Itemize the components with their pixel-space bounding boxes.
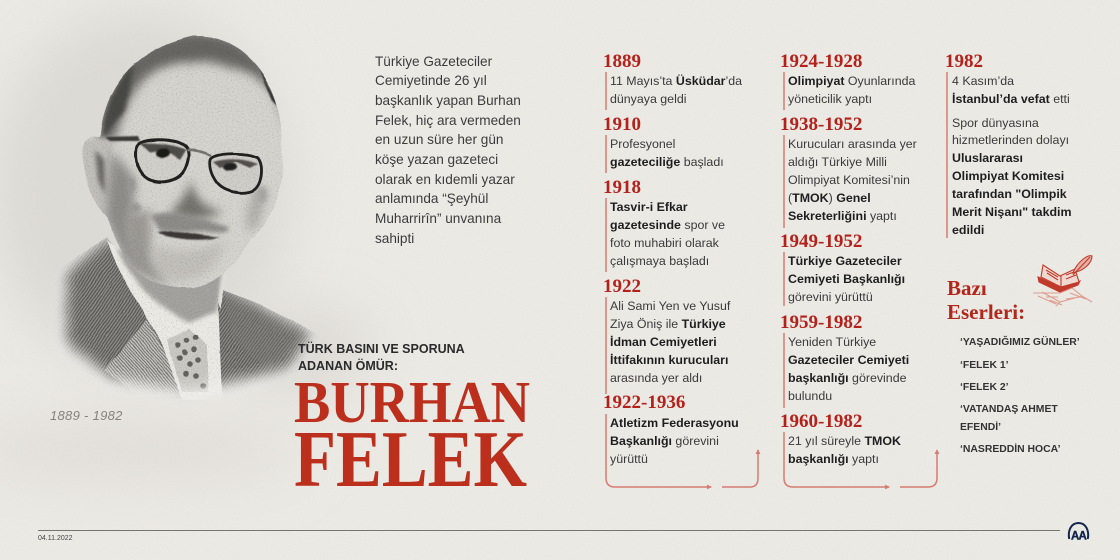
- intro text: sahipti: [375, 231, 414, 246]
- event 1924-1928: Olimpiyat Oyunlarında: [788, 74, 915, 88]
- event 1889: 11 Mayıs’ta Üsküdar’da: [610, 74, 742, 88]
- year 1960-1982: 1960-1982: [780, 411, 862, 432]
- event 1949-1952: Cemiyeti Başkanlığı: [788, 272, 905, 286]
- event 1938-1952: (TMOK) Genel: [788, 191, 871, 205]
- neck: [116, 245, 224, 322]
- title: FELEK: [294, 414, 527, 504]
- head: [82, 36, 283, 288]
- year 1889: 1889: [603, 51, 641, 72]
- event 1889: dünyaya geldi: [610, 92, 686, 106]
- heading: works: Eserleri:: [947, 300, 1025, 324]
- subtitle: [298, 342, 465, 373]
- year 1924-1928: 1924-1928: [780, 51, 862, 72]
- year 1922-1936: 1922-1936: [603, 392, 685, 413]
- portrait photo of Burhan Felek: [57, 35, 318, 400]
- event 1982 award: Spor dünyasına: [952, 116, 1039, 130]
- heading: works: Bazı: [947, 276, 987, 300]
- event 1918: çalışmaya başladı: [610, 254, 709, 268]
- work 3: ‘FELEK 2’: [960, 382, 1008, 393]
- intro text: Muharrirîn” unvanına: [375, 211, 501, 226]
- event 1982 award: tarafından "Olimpik: [952, 187, 1067, 201]
- event 1924-1928: [788, 74, 916, 106]
- work 4: EFENDİ’: [960, 422, 1001, 433]
- event 1938-1952: Kurucuları arasında yer: [788, 137, 917, 151]
- event 1982 death: İstanbul’da vefat etti: [952, 92, 1070, 106]
- event 1960-1982: başkanlığı yaptı: [788, 452, 879, 466]
- event 1982 award: Merit Nişanı" takdim: [952, 205, 1071, 219]
- year 1918: 1918: [603, 177, 641, 198]
- timeline column 2: [780, 51, 917, 466]
- event 1922: [610, 299, 730, 385]
- event 1982 award: Uluslararası: [952, 151, 1023, 165]
- event 1938-1952: Sekreterliğini yaptı: [788, 209, 897, 223]
- event 1922: İdman Cemiyetleri: [610, 335, 717, 349]
- event 1959-1982: [788, 335, 909, 403]
- year 1982: 1982: [945, 51, 983, 72]
- intro text: köşe yazan gazeteci: [375, 152, 498, 167]
- work 2: ‘FELEK 1’: [960, 360, 1008, 371]
- list of works: [960, 336, 1080, 455]
- year 1910: 1910: [603, 114, 641, 135]
- logo: AA: [1068, 522, 1090, 542]
- event 1918: foto muhabiri olarak: [610, 236, 719, 250]
- event 1922: arasında yer aldı: [610, 371, 702, 385]
- work 5: ‘NASREDDİN HOCA’: [960, 444, 1060, 455]
- event 1922: İttifakının kurucuları: [610, 353, 728, 367]
- event 1982 award: [952, 116, 1071, 237]
- intro text: en uzun süre her gün: [375, 132, 503, 147]
- work 4: ‘VATANDAŞ AHMET: [960, 404, 1058, 415]
- event 1960-1982: 21 yıl süreyle TMOK: [788, 434, 901, 448]
- title: BURHAN: [294, 369, 530, 435]
- subtitle: TÜRK BASINI VE SPORUNA: [298, 342, 465, 356]
- event 1959-1982: Yeniden Türkiye: [788, 335, 876, 349]
- intro text: olarak en kıdemli yazar: [375, 172, 515, 187]
- event 1982 award: hizmetlerinden dolayı: [952, 133, 1069, 147]
- event 1949-1952: görevini yürüttü: [788, 290, 873, 304]
- intro text: [375, 54, 521, 246]
- event 1889: [610, 74, 742, 106]
- event 1910: Profesyonel: [610, 137, 675, 151]
- timeline column 1: [603, 51, 742, 466]
- icon: book and quill: [1033, 255, 1093, 306]
- year 1949-1952: 1949-1952: [780, 231, 862, 252]
- event 1982 death: 4 Kasım’da: [952, 74, 1014, 88]
- event 1982 death: [952, 74, 1070, 106]
- date: 04.11.2022: [38, 535, 73, 542]
- intro text: Felek, hiç ara vermeden: [375, 113, 521, 128]
- event 1918: gazetesinde spor ve: [610, 218, 725, 232]
- event 1910: [610, 137, 724, 169]
- event 1938-1952: aldığı Türkiye Milli: [788, 155, 887, 169]
- event 1922-1936: yürüttü: [610, 452, 648, 466]
- work 1: ‘YAŞADIĞIMIZ GÜNLER’: [960, 337, 1080, 348]
- event 1959-1982: başkanlığı görevinde: [788, 371, 906, 385]
- event 1922: Ziya Öniş ile Türkiye: [610, 317, 726, 331]
- timeline column 3: [945, 51, 1071, 237]
- year 1959-1982: 1959-1982: [780, 312, 862, 333]
- event 1922: Ali Sami Yen ve Yusuf: [610, 299, 730, 313]
- event 1938-1952: [788, 137, 917, 223]
- event 1982 award: edildi: [952, 223, 984, 237]
- glasses: [105, 136, 140, 141]
- event 1938-1952: Olimpiyat Komitesi’nin: [788, 173, 910, 187]
- event 1959-1982: Gazeteciler Cemiyeti: [788, 353, 909, 367]
- intro text: anlamında “Şeyhül: [375, 191, 488, 206]
- event 1910: gazeteciliğe başladı: [610, 155, 724, 169]
- event 1918: Tasvir-i Efkar: [610, 200, 688, 214]
- intro text: Türkiye Gazeteciler: [375, 54, 492, 68]
- work 4: [960, 404, 1058, 433]
- event 1959-1982: bulundu: [788, 389, 832, 403]
- heading: works: [947, 276, 1025, 324]
- event 1922-1936: [610, 416, 739, 466]
- year 1938-1952: 1938-1952: [780, 114, 862, 135]
- event 1922-1936: Başkanlığı görevini: [610, 434, 719, 448]
- event 1924-1928: yöneticilik yaptı: [788, 92, 872, 106]
- subtitle: ADANAN ÖMÜR:: [298, 359, 398, 373]
- year 1922: 1922: [603, 276, 641, 297]
- intro text: başkanlık yapan Burhan: [375, 93, 521, 108]
- event 1949-1952: [788, 254, 905, 304]
- intro text: Cemiyetinde 26 yıl: [375, 73, 487, 88]
- event 1960-1982: [788, 434, 901, 466]
- event 1918: [610, 200, 725, 268]
- event 1982 award: Olimpiyat Komitesi: [952, 169, 1064, 183]
- suit: [57, 238, 318, 400]
- event 1949-1952: Türkiye Gazeteciler: [788, 254, 902, 268]
- event 1922-1936: Atletizm Federasyonu: [610, 416, 739, 430]
- life dates under portrait: 1889 - 1982: [50, 408, 123, 423]
